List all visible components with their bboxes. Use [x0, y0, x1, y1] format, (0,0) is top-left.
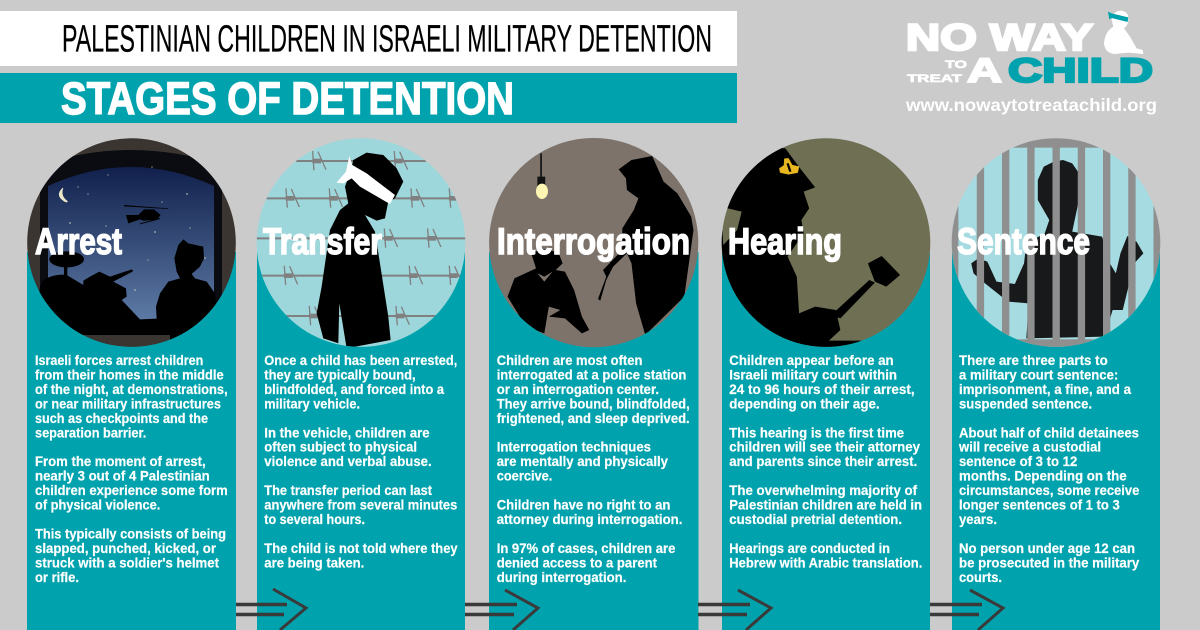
text: hearing description: 24 to 96 hours of their arrest,	[729, 381, 915, 397]
text: transfer description: Once a child has been arrested,	[264, 352, 457, 368]
logo: no way to treat a child: CHILD	[1008, 52, 1153, 90]
silhouette: seated child	[508, 249, 589, 333]
text: transfer description: The transfer period can last	[264, 482, 432, 498]
text: transfer description: In the vehicle, children are	[264, 424, 430, 440]
text: arrest description: or rifle.	[35, 569, 79, 585]
heading: hearing: Hearing	[728, 221, 842, 262]
text: sentence description: courts.	[959, 569, 1002, 585]
text: arrest description: nearly 3 out of 4 Palestinian	[35, 468, 210, 484]
text: sentence description: suspended sentence.	[959, 395, 1092, 411]
text: interrogation description: attorney during interrogation.	[497, 511, 682, 527]
collar	[537, 272, 553, 282]
icon: helmet badge	[779, 158, 799, 174]
text: sentence description: a military court sentence:	[959, 366, 1118, 382]
text: sentence description	[958, 352, 1139, 585]
panel: sentence	[950, 138, 1163, 630]
illustration: child behind prison bars	[950, 138, 1163, 349]
text: arrest description: slapped, punched, kicked, or	[35, 540, 217, 556]
text: transfer description: The child is not told where they	[264, 540, 458, 556]
text: sentence description: months. Depending on the	[959, 468, 1127, 484]
text: arrest description: struck with a soldier's helmet	[35, 554, 219, 570]
arrow: hearing to sentence	[930, 590, 1003, 630]
text: interrogation description: denied access to a parent	[497, 554, 657, 570]
text: hearing description: and parents since their arrest.	[729, 453, 917, 469]
text: sentence description: will receive a custodial	[958, 439, 1101, 455]
text: transfer description	[264, 352, 458, 570]
logo: no way to treat a child: A	[967, 52, 1002, 90]
heading: interrogation: Interrogation	[497, 221, 690, 262]
barbed wire	[257, 151, 467, 325]
gavel	[831, 256, 900, 318]
text: interrogation description: Interrogation techniques	[497, 439, 651, 455]
text: transfer description: to several hours.	[264, 511, 365, 527]
text: interrogation description: They arrive bound, blindfolded,	[497, 395, 690, 411]
text: sentence description: sentence of 3 to 12	[959, 453, 1077, 469]
illustration: soldier and seated child under a light bulb	[488, 138, 700, 348]
text: hearing description: The overwhelming majority of	[729, 482, 917, 498]
icon: blindfolded child	[1104, 11, 1143, 54]
text: interrogation description: during interrogation.	[497, 569, 626, 585]
text: sentence description: There are three parts to	[959, 352, 1108, 368]
illustration: night window with helicopter, tank and child	[27, 138, 236, 348]
heading: arrest: Arrest	[35, 221, 122, 262]
silhouette: judge	[719, 143, 861, 352]
text: hearing description: Hebrew with Arabic translation.	[729, 554, 922, 570]
text: interrogation description: coercive.	[497, 468, 552, 484]
text: sentence description: No person under age 12 can	[959, 540, 1135, 556]
text: interrogation description: Children have no right to an	[497, 496, 670, 512]
illustration: military judge with gavel	[719, 138, 932, 352]
text: sentence description: longer sentences of 1 to 3	[959, 496, 1120, 512]
text: sentence description: imprisonment, a fine, and a	[959, 381, 1131, 397]
prison bars	[951, 138, 1163, 349]
heading: stages of detention: STAGES OF DETENTION	[61, 73, 514, 124]
silhouette: child	[317, 153, 403, 348]
text: interrogation description: Children are most often	[497, 352, 642, 368]
arrow: arrest to transfer	[236, 589, 306, 630]
heading: sentence: Sentence	[957, 221, 1090, 262]
logo: no way to treat a child	[905, 11, 1157, 115]
panel: hearing	[719, 138, 932, 630]
text: arrest description: or near military infrastructures	[35, 395, 221, 411]
text: arrest description	[35, 352, 228, 585]
text: transfer description: often subject to physical	[264, 439, 417, 455]
panel: arrest	[27, 138, 236, 630]
text: interrogation description: or an interrogation center.	[497, 381, 659, 397]
text: interrogation description: interrogated at a police station	[497, 366, 686, 382]
text: transfer description: military vehicle.	[264, 395, 360, 411]
text: interrogation description	[497, 352, 690, 585]
text: hearing description: children will see their attorney	[729, 439, 920, 455]
text: interrogation description: are mentally and physically	[497, 453, 668, 469]
text: arrest description: children experience some form	[35, 482, 228, 498]
text: transfer description: anywhere from several minutes	[264, 496, 457, 512]
text: sentence description: years.	[959, 511, 997, 527]
logo: no way to treat a child: TREAT	[907, 73, 962, 85]
icon: light bulb	[536, 153, 548, 199]
text: hearing description: This hearing is the first time	[729, 424, 904, 440]
text: hearing description: Children appear before an	[729, 352, 894, 368]
text: transfer description: violence and verbal abuse.	[264, 453, 432, 469]
text: hearing description: Hearings are conducted in	[729, 540, 890, 556]
text: interrogation description: frightened, and sleep deprived.	[497, 410, 690, 426]
text: transfer description: they are typically bound,	[264, 366, 416, 382]
logo: no way to treat a child: TO	[945, 59, 968, 71]
text: arrest description: of the night, at demonstrations,	[35, 381, 228, 397]
text: arrest description: of physical violence.	[35, 496, 160, 512]
text: transfer description: are being taken.	[264, 554, 364, 570]
text: arrest description: separation barrier.	[35, 424, 146, 440]
heading: transfer: Transfer	[263, 221, 382, 262]
silhouette: child	[971, 160, 1143, 338]
logo: no way to treat a child: NO WAY	[906, 17, 1093, 58]
text: arrest description: Israeli forces arrest children	[35, 352, 203, 368]
text: hearing description	[729, 352, 922, 570]
title banner	[0, 11, 737, 66]
icon: crescent moon	[59, 188, 67, 202]
text: hearing description: custodial pretrial detention.	[729, 511, 902, 527]
arrow: transfer to interrogation	[465, 590, 538, 630]
text: transfer description: blindfolded, and forced into a	[264, 381, 444, 397]
silhouette: soldier	[598, 156, 693, 335]
arrow: interrogation to hearing	[698, 590, 771, 630]
logo: no way to treat a child: www.nowaytotreatachild.org	[905, 95, 1157, 115]
text: sentence description: circumstances, some receive	[959, 482, 1139, 498]
icon: helicopter	[124, 205, 168, 224]
panel: transfer	[256, 138, 467, 630]
text: arrest description: From the moment of arrest,	[35, 453, 206, 469]
text: hearing description: Israeli military court within	[729, 366, 897, 382]
blindfold	[337, 156, 395, 204]
text: hearing description: Palestinian children are held in	[729, 496, 922, 512]
text: arrest description: This typically consists of being	[35, 525, 226, 541]
text: sentence description: About half of child detainees	[959, 424, 1139, 440]
title banner: PALESTINIAN CHILDREN IN ISRAELI MILITARY DETENTION	[62, 18, 712, 60]
text: interrogation description: In 97% of cases, children are	[497, 540, 676, 556]
illustration: blindfolded child before barbed wire	[256, 138, 467, 348]
text: arrest description: from their homes in the middle	[35, 366, 224, 382]
text: sentence description: be prosecuted in the military	[959, 554, 1139, 570]
text: arrest description: such as checkpoints and the	[35, 410, 208, 426]
silhouette: hills, tank, tree and child	[33, 239, 220, 343]
text: hearing description: depending on their age.	[729, 395, 880, 411]
panel: interrogation	[488, 138, 700, 630]
